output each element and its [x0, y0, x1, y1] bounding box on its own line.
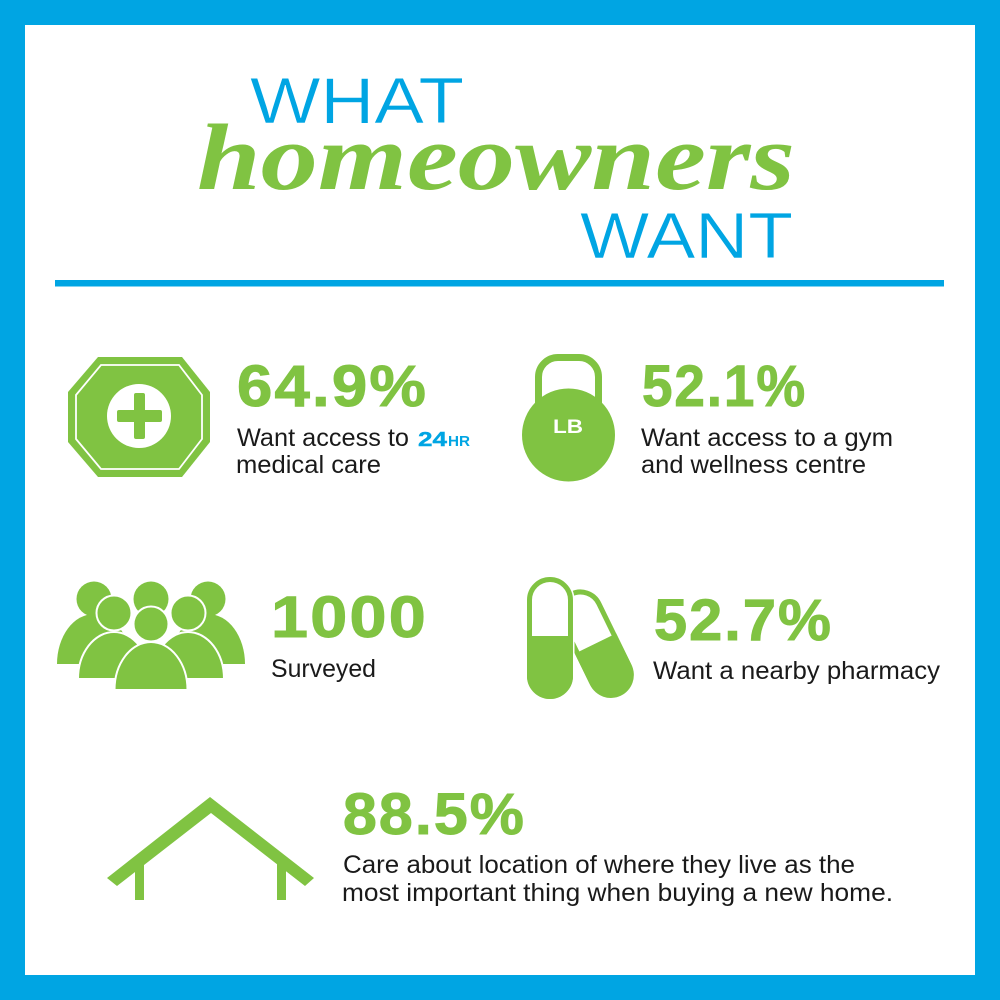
stat: pharmacy [527, 580, 941, 706]
description: medical care: HR [448, 433, 470, 450]
description: medical care [236, 424, 470, 479]
description: gym: and wellness centre [641, 451, 866, 479]
stat: surveyed [57, 582, 428, 690]
description: gym [641, 424, 893, 479]
title: homeowners [197, 106, 795, 210]
description: location: most important thing when buying a new home. [342, 879, 893, 907]
description: medical care: Want access to [237, 424, 409, 452]
value: 52.7%: 52.7% [654, 588, 833, 653]
value: 52.1%: 52.1% [642, 354, 807, 419]
description: surveyed: Surveyed [271, 655, 376, 683]
description: pharmacy: Want a nearby pharmacy [653, 657, 941, 685]
stat: gym [522, 354, 893, 482]
icon: pills [527, 580, 642, 706]
title rule [55, 280, 944, 286]
description: location: Care about location of where they live as the [343, 851, 855, 879]
value: 64.9%: 64.9% [237, 354, 428, 419]
description: gym: Want access to a gym [641, 424, 893, 452]
title: WANT [580, 199, 793, 272]
icon: medical cross octagon [68, 357, 210, 477]
title [197, 64, 795, 272]
title: WHAT [250, 64, 464, 137]
value: 1000: 1000 [271, 585, 428, 650]
icon: kettlebell [522, 358, 615, 482]
stat: location [107, 782, 893, 907]
value: 88.5%: 88.5% [343, 782, 526, 847]
description: medical care: medical care [236, 451, 381, 479]
stat: medical care [68, 354, 470, 479]
icon: kettlebell: LB [553, 416, 583, 438]
icon: house roof [107, 797, 314, 900]
description: medical care: 24 [418, 429, 448, 451]
icon: group of people [57, 582, 245, 690]
description: location [342, 851, 893, 907]
